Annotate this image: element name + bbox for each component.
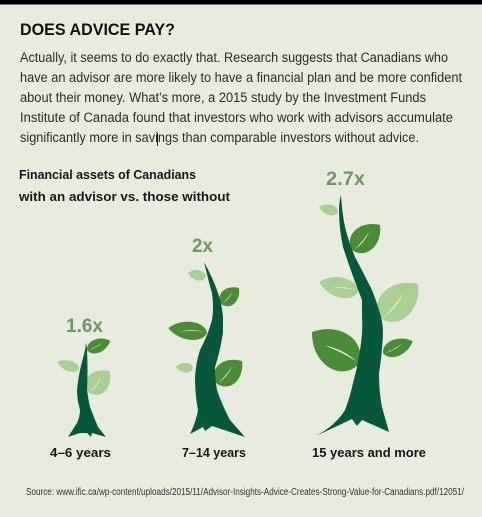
leaf: dark lower right [208,352,250,392]
leaf: big light right [369,271,429,331]
intro paragraph: Institute of Canada found that investors who work with advisors accumulate [20,110,453,125]
title: DOES ADVICE PAY? [20,21,175,39]
trunk [68,342,106,437]
leaf: light left [317,272,360,302]
chart subtitle [18,167,231,204]
leaf: dark upper right [344,216,388,259]
leaf: small light left [176,362,193,373]
intro paragraph [20,50,462,145]
intro paragraph: significantly more in savings than comparable investors without advice. [20,130,419,145]
plant: 7–14 years, 2x [167,235,250,460]
leaf: big dark left [301,317,369,380]
chart subtitle: Financial assets of Canadians [19,167,196,182]
leaf: dark top right [215,282,245,310]
intro paragraph: have an advisor are more likely to have a financial plan and be more confident [20,70,462,85]
leaf: light right [80,363,117,400]
label: 4–6 years: 4–6 years [50,445,111,460]
leaf: small dark right [380,333,416,361]
leaf: light left [55,357,81,374]
leaf: dark left [167,319,208,342]
leaf: small light top [318,202,339,217]
label: 7–14 years: 7–14 years [182,445,246,460]
plant: 15 years and more, 2.7x [301,168,429,460]
trunk [316,195,389,436]
intro paragraph: about their money. What’s more, a 2015 study by the Investment Funds [20,90,426,105]
plant: 4–6 years, 1.6x [50,315,117,460]
value: 2x: 2x [192,235,213,257]
value: 2.7x: 2.7x [326,168,365,190]
leaf: dark top [85,335,113,356]
value: 1.6x: 1.6x [66,315,103,337]
leaf: small light top [187,268,207,282]
chart subtitle: with an advisor vs. those without [18,189,231,204]
label: 15 years and more: 15 years and more [312,445,426,460]
intro paragraph: Actually, it seems to do exactly that. Research suggests that Canadians who [20,50,448,65]
trunk [190,262,245,437]
